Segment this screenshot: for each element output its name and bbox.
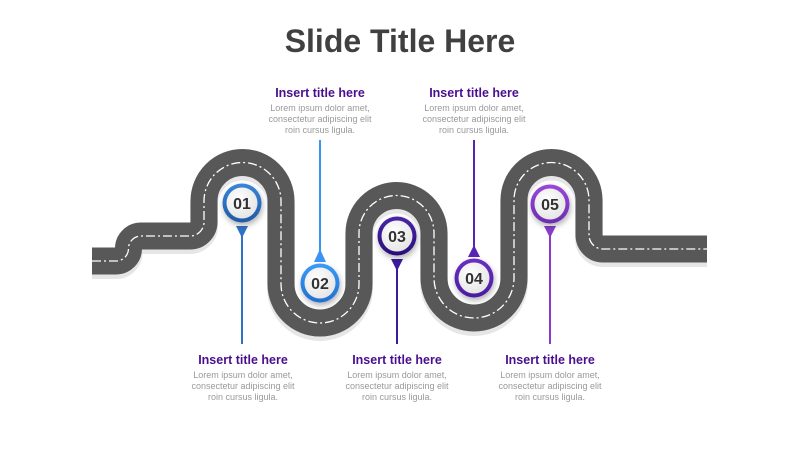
text block 01: Lorem ipsum dolor amet, xyxy=(193,370,293,380)
text block 02: consectetur adipiscing elit xyxy=(268,114,372,124)
text block 02: Lorem ipsum dolor amet, xyxy=(270,103,370,113)
text block 03: Insert title here xyxy=(352,353,442,367)
text block 01: Insert title here xyxy=(198,353,288,367)
text block 03 xyxy=(345,353,449,402)
text block 05: Insert title here xyxy=(505,353,595,367)
marker 02 xyxy=(300,264,340,302)
text block 02: roin cursus ligula. xyxy=(285,125,355,135)
road xyxy=(92,162,707,327)
text block 01: roin cursus ligula. xyxy=(208,392,278,402)
pointer line 05 xyxy=(544,226,556,344)
text block 02 xyxy=(268,86,372,135)
text block 05: Lorem ipsum dolor amet, xyxy=(500,370,600,380)
text block 03: Lorem ipsum dolor amet, xyxy=(347,370,447,380)
text block 01 xyxy=(191,353,295,402)
marker 04 xyxy=(454,258,494,298)
marker 01 xyxy=(222,184,262,222)
pointer line 04 xyxy=(468,140,480,257)
text block 04: roin cursus ligula. xyxy=(439,125,509,135)
text block 05: consectetur adipiscing elit xyxy=(498,381,602,391)
text block 05 xyxy=(498,353,602,402)
text block 04: Lorem ipsum dolor amet, xyxy=(424,103,524,113)
text block 02: Insert title here xyxy=(275,86,365,100)
text block 04: consectetur adipiscing elit xyxy=(422,114,526,124)
text block 03: roin cursus ligula. xyxy=(362,392,432,402)
marker 04: 04 xyxy=(465,271,483,288)
text block 04: Insert title here xyxy=(429,86,519,100)
marker 03: 03 xyxy=(388,229,406,246)
text block 04 xyxy=(422,86,526,135)
text block 05: roin cursus ligula. xyxy=(515,392,585,402)
marker 02: 02 xyxy=(311,276,329,293)
marker 03 xyxy=(378,216,416,256)
pointer line 02 xyxy=(314,140,326,262)
marker 05 xyxy=(530,184,570,224)
marker 01: 01 xyxy=(233,196,251,213)
pointer line 01 xyxy=(236,226,248,344)
text block 01: consectetur adipiscing elit xyxy=(191,381,295,391)
marker 05: 05 xyxy=(541,197,559,214)
text block 03: consectetur adipiscing elit xyxy=(345,381,449,391)
pointer line 03 xyxy=(391,259,403,344)
title: Slide Title Here xyxy=(285,23,515,59)
